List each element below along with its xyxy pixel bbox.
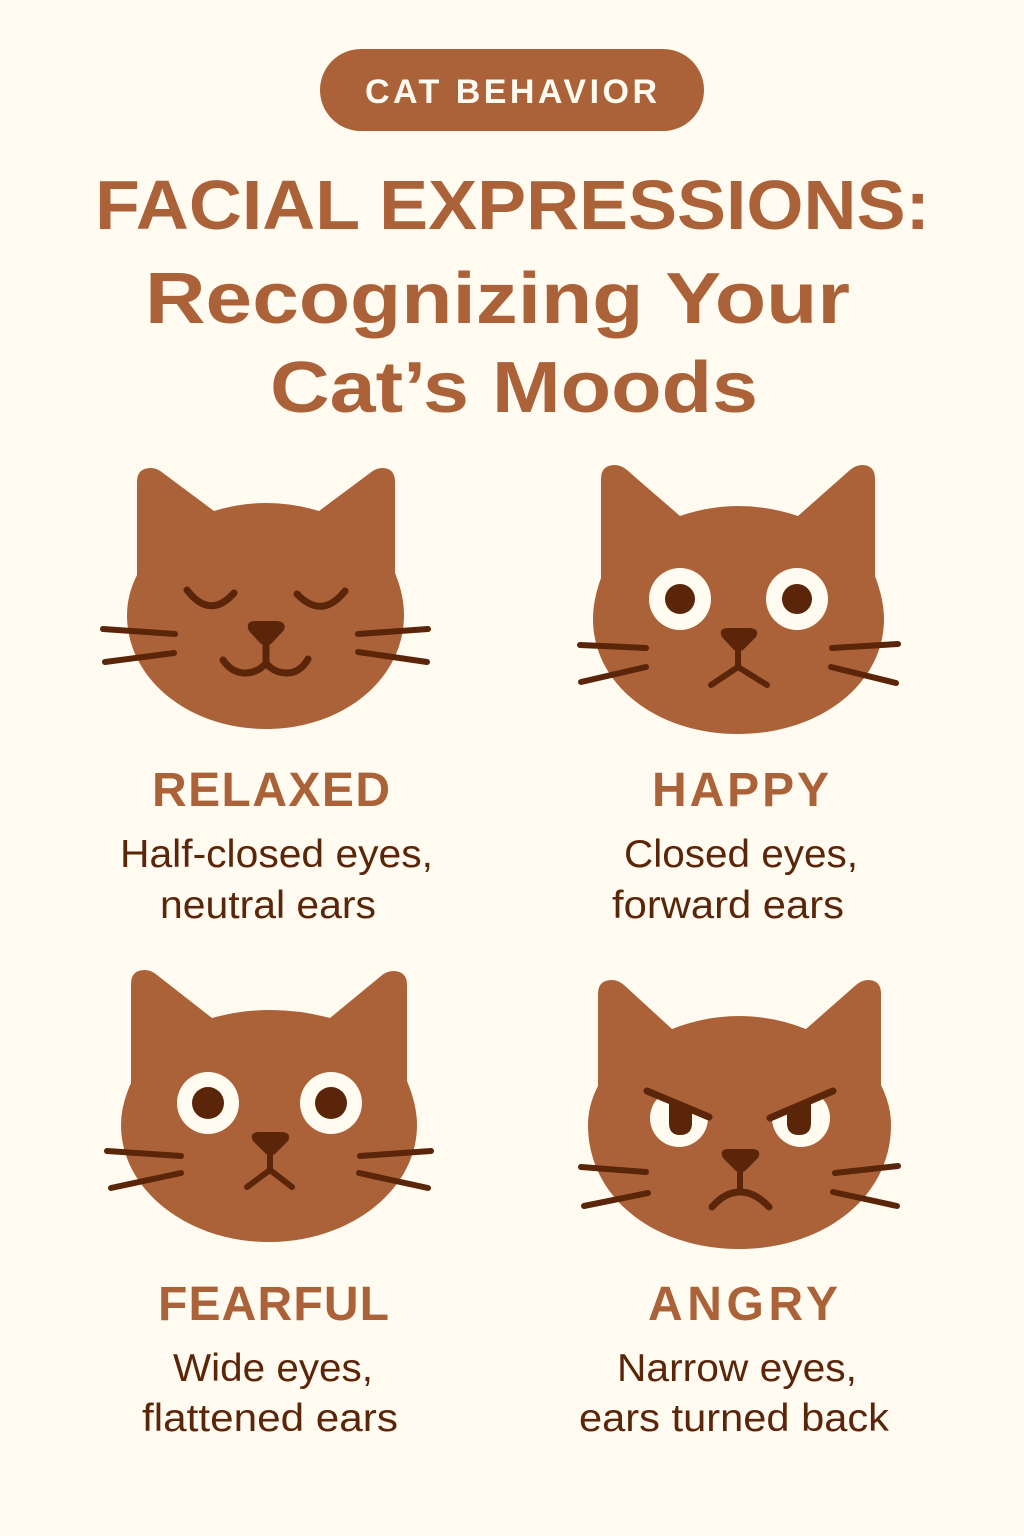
panel: angry <box>579 980 898 1440</box>
title <box>95 166 930 428</box>
label: fearful: FEARFUL <box>158 1278 389 1331</box>
icon: relaxed cat face <box>103 468 428 729</box>
description: angry <box>579 1347 890 1440</box>
title: Cat’s Moods <box>270 348 758 428</box>
title: Recognizing Your <box>145 259 850 339</box>
description: relaxed <box>120 833 433 927</box>
description: happy <box>612 833 858 927</box>
icon: happy cat face <box>580 465 898 734</box>
description: angry: ears turned back <box>579 1397 890 1440</box>
description: relaxed: Half-closed eyes, <box>120 833 433 876</box>
panel: fearful <box>107 970 431 1440</box>
panel: relaxed <box>103 468 433 927</box>
description: angry: Narrow eyes, <box>617 1347 857 1390</box>
icon: angry cat face <box>581 980 898 1249</box>
label: angry: ANGRY <box>648 1278 838 1331</box>
description: happy: Closed eyes, <box>624 833 858 876</box>
badge: cat behavior <box>320 49 704 131</box>
description: fearful: Wide eyes, <box>173 1347 373 1390</box>
description: happy: forward ears <box>612 884 844 927</box>
description: fearful: flattened ears <box>142 1397 398 1440</box>
label: relaxed: RELAXED <box>152 764 390 817</box>
icon: fearful cat face <box>107 970 431 1242</box>
title: FACIAL EXPRESSIONS: <box>95 166 930 244</box>
label: happy: HAPPY <box>652 764 829 817</box>
badge: cat behavior: CAT BEHAVIOR <box>365 73 657 111</box>
panel: happy <box>580 465 898 927</box>
description: fearful <box>142 1347 398 1440</box>
description: relaxed: neutral ears <box>160 884 376 927</box>
